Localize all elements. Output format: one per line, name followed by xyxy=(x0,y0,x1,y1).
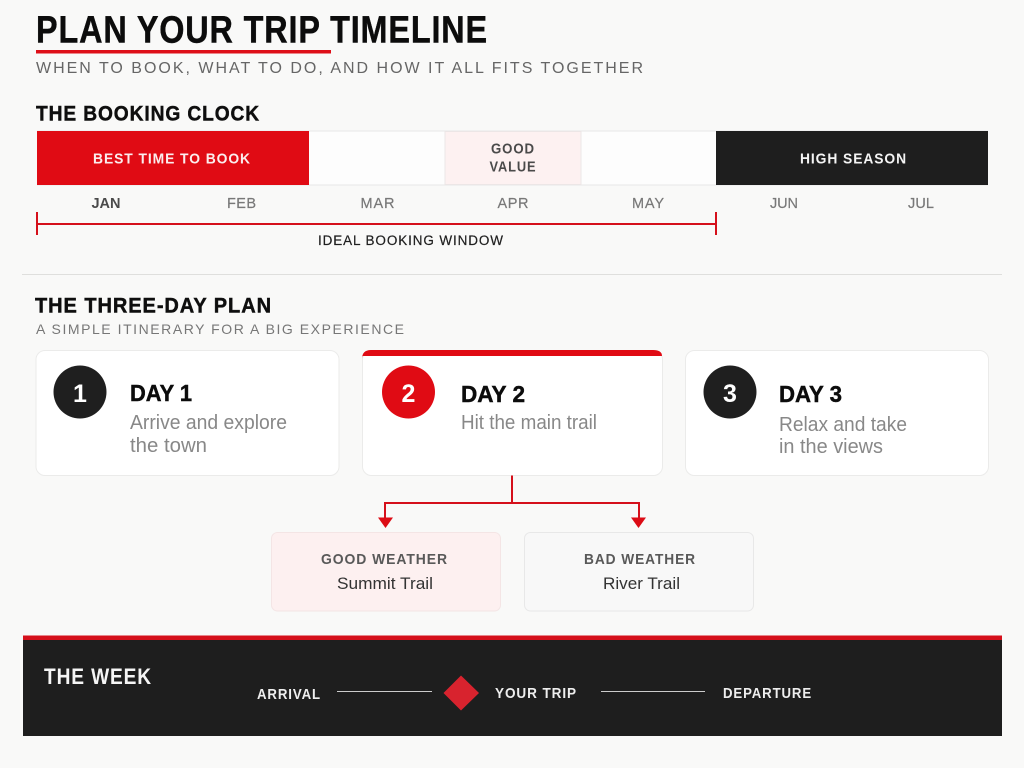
panel: day 3 xyxy=(686,350,988,476)
panel: day 3: in the views xyxy=(779,436,883,458)
segment: good value xyxy=(445,132,581,184)
month labels xyxy=(92,196,934,212)
month labels: JUN xyxy=(770,196,798,212)
month labels: JAN xyxy=(92,196,120,212)
icon: number 1: 1 xyxy=(73,380,87,408)
panel: good weather xyxy=(272,532,500,611)
panel: day 3: DAY 3 xyxy=(779,381,842,407)
icon: number 2: 2 xyxy=(402,380,415,408)
month labels: JUL xyxy=(908,196,934,212)
panel: bad weather: BAD WEATHER xyxy=(584,551,696,568)
panel: day 2: Hit the main trail xyxy=(461,412,597,434)
panel: good weather: GOOD WEATHER xyxy=(321,551,448,568)
segment: empty track xyxy=(38,131,988,185)
month labels: APR xyxy=(498,196,528,212)
icon: number 2 xyxy=(382,366,435,418)
panel: bad weather: River Trail xyxy=(603,574,680,593)
icon: number 3: 3 xyxy=(723,380,737,408)
heading: the booking clock: THE BOOKING CLOCK xyxy=(36,102,260,126)
title: PLAN YOUR TRIP TIMELINE xyxy=(36,10,488,52)
panel: bad weather xyxy=(524,532,754,611)
label: departure: DEPARTURE xyxy=(723,685,812,702)
panel: good weather: Summit Trail xyxy=(337,574,433,593)
segment: high season: HIGH SEASON xyxy=(800,150,907,168)
subtitle: WHEN TO BOOK, WHAT TO DO, AND HOW IT ALL FITS TOGETHER xyxy=(36,60,643,77)
icon: diamond xyxy=(444,676,479,710)
panel: day 1: the town xyxy=(130,435,207,457)
panel: day 2 xyxy=(362,350,662,476)
ideal booking window bracket xyxy=(37,212,716,248)
arrow: day 2 branches to weather options xyxy=(378,476,646,528)
icon: number 3 xyxy=(704,366,756,418)
label: your trip: YOUR TRIP xyxy=(495,685,577,702)
icon: number 1 xyxy=(54,366,106,418)
booking bar chart xyxy=(37,131,988,185)
heading: the week: THE WEEK xyxy=(44,664,152,689)
segment: high season xyxy=(716,131,988,185)
ideal booking window bracket: IDEAL BOOKING WINDOW xyxy=(318,233,503,248)
month labels: MAR xyxy=(360,196,394,212)
label: arrival: ARRIVAL xyxy=(257,686,321,703)
panel: day 1: Arrive and explore xyxy=(130,412,287,434)
segment: best time to book: BEST TIME TO BOOK xyxy=(93,150,251,168)
subheading: A SIMPLE ITINERARY FOR A BIG EXPERIENCE xyxy=(36,321,404,337)
panel: day 2: DAY 2 xyxy=(461,381,525,407)
panel: day 1: DAY 1 xyxy=(130,380,192,406)
panel: day 1 xyxy=(36,350,339,476)
panel: the week xyxy=(23,636,1002,736)
segment: good value: GOOD xyxy=(491,142,535,158)
segment: best time to book xyxy=(37,131,309,185)
panel: day 3: Relax and take xyxy=(779,414,907,436)
segment: good value: VALUE xyxy=(490,160,536,176)
month labels: MAY xyxy=(632,196,664,212)
heading: the three-day plan: THE THREE-DAY PLAN xyxy=(35,294,272,318)
month labels: FEB xyxy=(227,196,256,212)
